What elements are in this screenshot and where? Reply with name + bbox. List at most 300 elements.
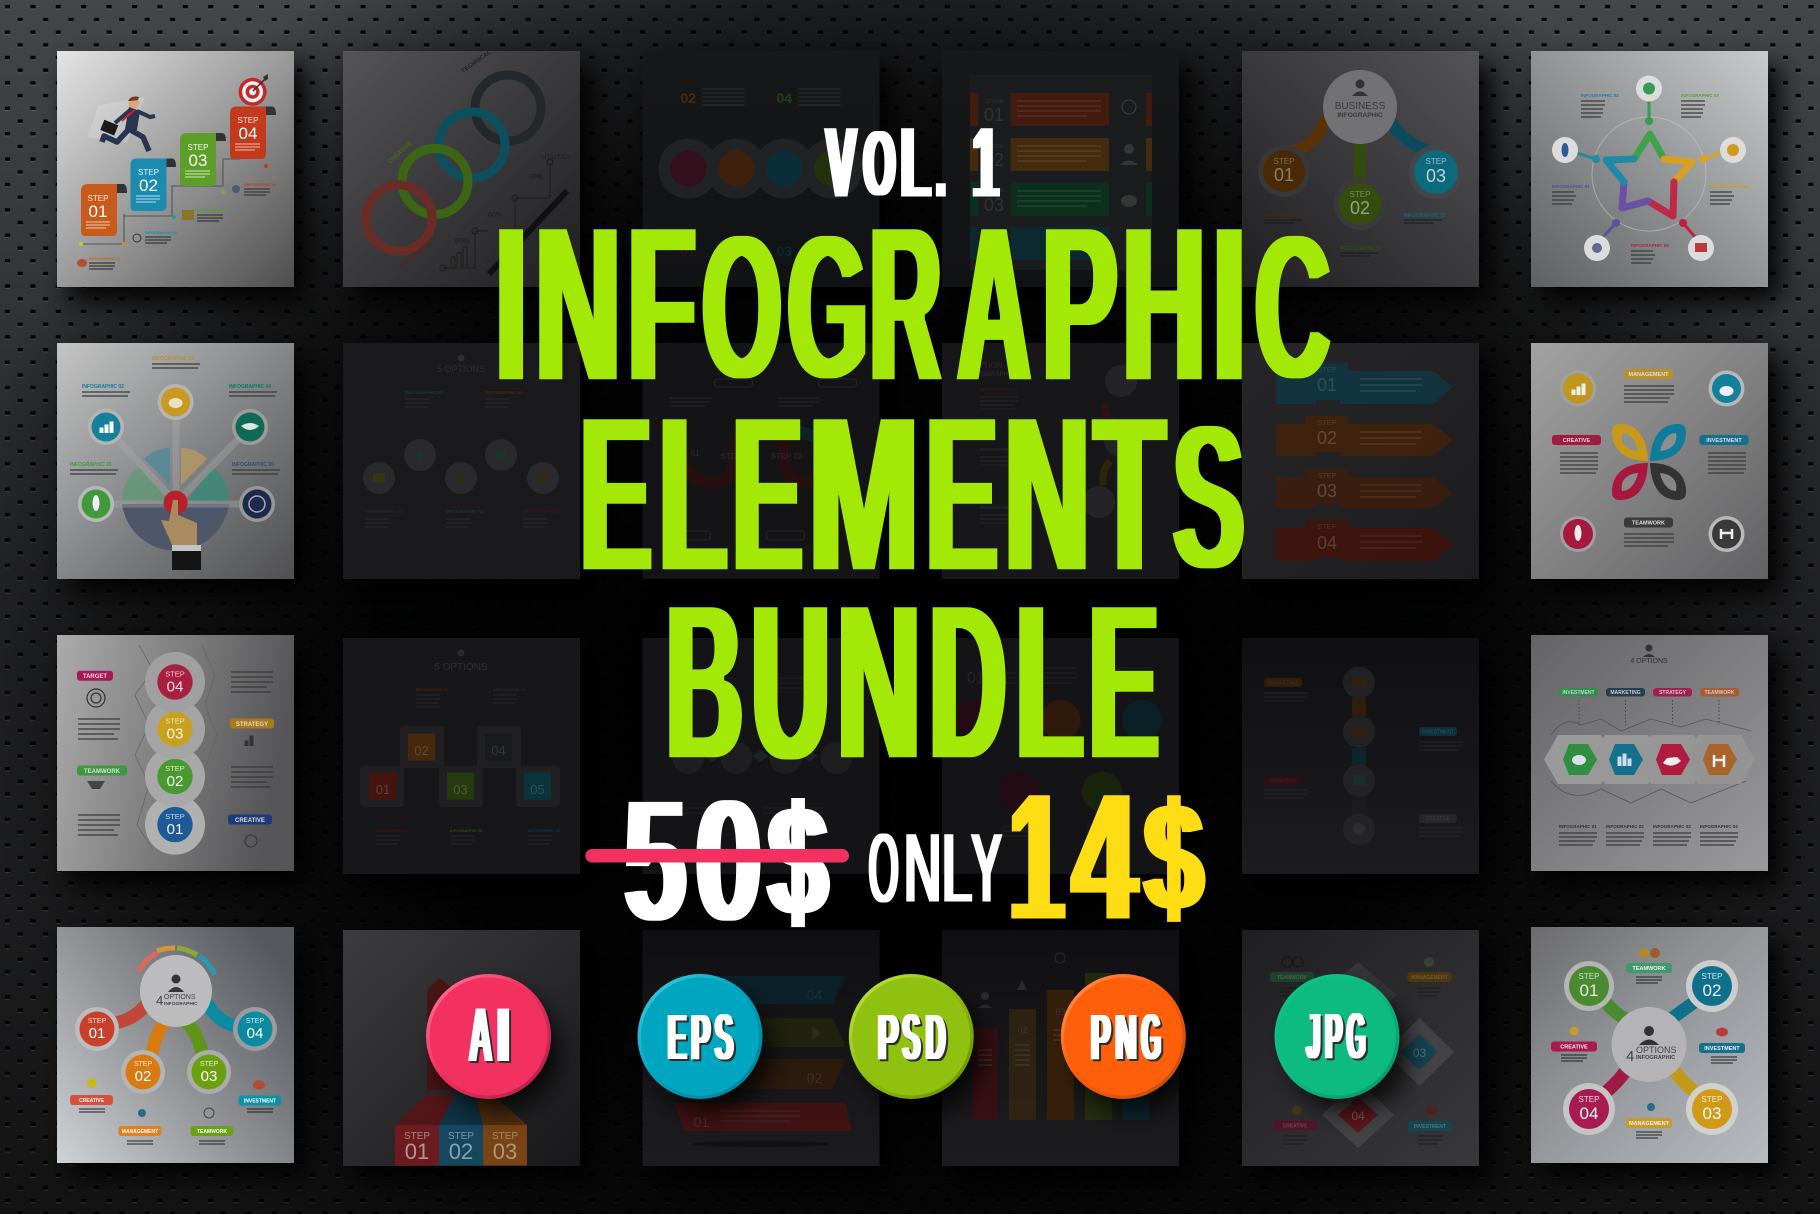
ring: green (402, 148, 468, 214)
step 03 (1686, 1083, 1738, 1135)
labels: INFOGRAPHIC 04 (229, 384, 271, 390)
panel: option connectors (dim) (942, 343, 1179, 579)
tags: TEAMWORK (1277, 975, 1307, 981)
option 03 bar: OPTION (984, 188, 1004, 194)
captions (365, 390, 561, 514)
step 01: STEP (165, 812, 185, 821)
banner step 04: 04 (807, 987, 822, 1003)
button and hand (161, 491, 201, 570)
badge: EPS: P (691, 1000, 710, 1075)
sketch: rising bars and pen (440, 155, 570, 274)
tags: INVESTMENT (1414, 1124, 1446, 1130)
step 03: STEP (200, 1061, 218, 1068)
step labels: 03 (776, 243, 792, 259)
title: infographic: P (1042, 179, 1117, 429)
petals (1612, 424, 1686, 500)
step 01 ribbon: 01 (89, 202, 107, 221)
header (1630, 644, 1668, 665)
ring captions: TECHNICAL (461, 50, 493, 75)
step 02 circle: 02 (1350, 198, 1370, 218)
badge: AI: I (496, 991, 511, 1079)
infographic notes: INFOGRAPHIC 02 (145, 231, 177, 235)
captions: INFOGRAPHIC 04 (485, 390, 523, 395)
step 04 ribbon: STEP (238, 116, 258, 125)
step 01: STEP (404, 1131, 430, 1142)
badge: JPG: G (1347, 999, 1365, 1074)
star ribbon (1606, 134, 1692, 216)
tags: MANAGEMENT (1629, 1121, 1670, 1127)
infographic notes (77, 164, 277, 269)
step 04 (145, 652, 205, 712)
title: infographic: I (1213, 179, 1246, 429)
banner step 04 (674, 976, 846, 1004)
step 02 (121, 1050, 165, 1094)
step 04 ribbon: 04 (239, 124, 257, 143)
hub: 4 (156, 993, 163, 1008)
price: new price 14$: $ (1144, 767, 1203, 946)
step captions: 01 (690, 449, 700, 458)
step captions: STEP 03 (770, 452, 803, 461)
tags: MANAGEMENT (1411, 975, 1448, 981)
option 02 bar: OPTION (984, 144, 1004, 150)
pills (77, 671, 274, 824)
panel: fan wheel with pointing hand (57, 343, 294, 579)
banner step 01: 01 (694, 1114, 709, 1130)
tags: MANAGEMENT (122, 1129, 158, 1135)
tags (1551, 963, 1745, 1128)
step 02: 02 (135, 1068, 151, 1085)
header: 5 OPTIONS (434, 662, 488, 673)
tags: TEAMWORK (1704, 690, 1735, 696)
pills: INVESTMENT (1706, 438, 1742, 444)
tags: MARKETING (1268, 680, 1298, 686)
captions: INFOGRAPHIC 04 (493, 688, 526, 692)
step 02: STEP (1702, 972, 1722, 981)
bar labels: 02 (1017, 1025, 1028, 1035)
captions: INFOGRAPHIC 01 (980, 387, 1018, 392)
step captions: STEP (720, 452, 742, 461)
arrow step 01: STEP (1318, 367, 1336, 374)
hub: INFOGRAPHIC (1636, 1055, 1675, 1061)
step 03: STEP (165, 716, 185, 726)
step 03 ribbon: 03 (189, 151, 207, 170)
title: elements: S (1173, 381, 1244, 612)
arrow step 04: 04 (1317, 533, 1337, 553)
ring: black (475, 75, 541, 141)
step 03: 03 (493, 1139, 517, 1164)
doodles (135, 645, 217, 850)
step 01: 01 (167, 821, 183, 838)
step label: 01 (967, 670, 985, 687)
step 03: 03 (201, 1068, 217, 1085)
panel: four option bars (942, 51, 1179, 287)
labels: INFOGRAPHIC 01 (70, 462, 112, 468)
badge: EPS: S (715, 1000, 733, 1075)
title: infographic: N (535, 179, 621, 429)
hub: OPTIONS (164, 994, 196, 1001)
header: 4 OPTIONS (1630, 658, 1668, 665)
satellite icons (78, 384, 275, 522)
title: infographic: F (628, 179, 696, 429)
connectors (1605, 1001, 1696, 1093)
step squares: 04 (491, 743, 506, 758)
panel: vertical timeline (dim) (1242, 638, 1479, 874)
bar labels (1017, 1007, 1066, 1035)
icons and notes (87, 689, 257, 847)
panel: four numbered circles row (642, 51, 880, 287)
diamonds: 04 (1351, 1109, 1365, 1123)
step 02 circle: STEP (1350, 190, 1370, 199)
step 02: 02 (449, 1139, 473, 1164)
column text: INFOGRAPHIC 02 (1606, 824, 1644, 829)
step 03: STEP (492, 1131, 518, 1142)
banner step 02 (674, 1059, 846, 1089)
captions: INFOGRAPHIC 02 (980, 447, 1018, 452)
header (434, 650, 488, 673)
step 03 (145, 699, 205, 759)
title: elements: T (1094, 369, 1165, 619)
bars (972, 973, 1149, 1120)
tags: INVESTMENT (244, 1098, 276, 1104)
step 03 circle (1409, 145, 1463, 199)
step 04: 04 (1580, 1104, 1598, 1123)
ring captions: INVESTMENT (398, 241, 432, 271)
title: elements: E (926, 369, 998, 619)
infographic notes: INFOGRAPHIC 01 (89, 257, 121, 261)
title: infographic: C (1255, 191, 1330, 422)
badge: PSD: D (926, 1000, 945, 1075)
captions: OPTION (972, 361, 1003, 370)
panel: step staircase with running businessman (57, 51, 294, 287)
ring captions (387, 50, 493, 271)
captions (972, 361, 1018, 510)
price: new price 14$: 1 (1009, 754, 1064, 960)
price: struck old price 50$: 5 (624, 763, 686, 959)
price: struck old price 50$: 0 (696, 763, 761, 959)
icon: running businessman (100, 96, 155, 151)
badge: JPG: J (1306, 999, 1320, 1074)
tags: TEAMWORK (197, 1129, 227, 1135)
tags: CREATIVE (79, 1098, 105, 1104)
text: 1 (973, 105, 998, 219)
column text: INFOGRAPHIC 01 (1559, 824, 1597, 829)
badge: PNG: N (1115, 1000, 1137, 1075)
icon: target (239, 74, 268, 106)
title: elements: L (659, 369, 727, 619)
step 03: 03 (167, 726, 183, 742)
title: infographic: H (1123, 179, 1205, 429)
captions: INFOGRAPHIC 03 (446, 509, 484, 514)
badge: PNG: P (1091, 1000, 1110, 1075)
title: vol. 1: V (826, 105, 856, 219)
hub: INFOGRAPHIC (164, 1001, 198, 1007)
arrow step 01: 01 (1317, 375, 1337, 395)
step 01 circle: STEP (1274, 157, 1294, 166)
step 03: 03 (1703, 1104, 1721, 1123)
step 04 ribbon (230, 106, 276, 159)
title: elements: E (733, 369, 802, 619)
tags (1559, 688, 1739, 696)
fan wedges (97, 403, 257, 551)
captions (376, 688, 560, 833)
panel: four options hub with corner steps (1531, 927, 1768, 1163)
panel: four arrow banners (dim) (1242, 343, 1479, 579)
panel: four petals (1531, 343, 1768, 579)
title: bundle: L (1016, 557, 1083, 807)
infographic notes: INFOGRAPHIC 03 (197, 209, 229, 213)
panel: four hexagons with doodles (1531, 635, 1768, 871)
banner step 01 (674, 1103, 852, 1131)
pills: MANAGEMENT (1628, 372, 1669, 378)
text: E (1089, 557, 1159, 807)
hexagons (1544, 735, 1755, 784)
step labels: 02 (680, 90, 696, 106)
tags: STRATEGY (1659, 690, 1687, 696)
ring: teal (439, 112, 505, 178)
panel: five stepped squares (dim) (343, 638, 580, 874)
step 03 circle: STEP (1426, 157, 1446, 166)
labels: INFOGRAPHIC 03 (152, 356, 194, 362)
title: vol. 1: L (901, 105, 930, 219)
panel: five circle wave (dim) (343, 343, 580, 579)
connectors (1292, 117, 1428, 179)
sketch: rising bars and pen: 90% (529, 174, 543, 181)
labels: INFOGRAPHIC 02 (1581, 93, 1619, 98)
step labels: 04 (776, 90, 792, 106)
step 01: STEP (88, 1018, 106, 1025)
labels: INFOGRAPHIC 03 (1681, 93, 1719, 98)
step 03: STEP (1702, 1095, 1722, 1104)
step 02 ribbon (130, 158, 176, 211)
price: only: N (904, 814, 941, 922)
captions: INFOGRAPHIC 01 (376, 829, 408, 833)
sketch: rising bars and pen: UTILITIES (542, 155, 570, 161)
icons (978, 953, 1065, 1008)
arc over hub (139, 953, 157, 971)
labels (70, 356, 274, 468)
price: struck old price 50$ (585, 763, 849, 959)
title: elements: M (809, 369, 919, 619)
badge: AI (426, 974, 560, 1112)
labels: INFOGRAPHIC 01 (1552, 184, 1590, 189)
column text (1559, 824, 1738, 829)
step 03 (483, 1125, 527, 1166)
title: infographic: O (702, 191, 781, 422)
option 04 bar (970, 227, 1152, 260)
labels: INFOGRAPHIC 02 (1340, 246, 1382, 252)
step 02 ribbon: 02 (139, 176, 158, 195)
title: bundle: U (751, 557, 830, 807)
hub circle (1323, 70, 1397, 144)
badge: PNG: G (1141, 1000, 1161, 1075)
tags: INVESTMENT (1562, 690, 1595, 696)
text: Y (972, 814, 1002, 922)
title: infographic: G (788, 191, 868, 422)
step 01: STEP (1579, 972, 1599, 981)
step 02 circle (1334, 178, 1386, 230)
diamonds (1319, 962, 1454, 1148)
option 01 bar (970, 93, 1152, 126)
step 03 circle: 03 (1426, 166, 1446, 186)
arrow step 03: STEP (1318, 473, 1336, 480)
step squares: 05 (530, 782, 545, 797)
tags: CREATIVE (1560, 1044, 1588, 1050)
step 01: 01 (89, 1025, 105, 1042)
tags: INVESTMENT (1422, 730, 1454, 736)
price: struck old price 50$: $ (768, 769, 828, 952)
labels: INFOGRAPHIC 05 (1631, 243, 1669, 248)
badge: PNG (1061, 974, 1195, 1112)
step 03 ribbon (180, 133, 226, 186)
badge: EPS: E (668, 1000, 686, 1075)
panel: interlocking rings (343, 50, 580, 287)
arrow step 04 (1276, 520, 1453, 561)
step squares (369, 734, 551, 800)
arrow step 02: STEP (1318, 420, 1336, 427)
panel: s-curve steps (dim) (642, 343, 880, 579)
labels (1264, 213, 1446, 252)
step 04: 04 (247, 1025, 263, 1042)
header (437, 354, 485, 374)
step squares: 02 (414, 743, 429, 758)
panel: diamonds (dim) (1242, 930, 1479, 1166)
column text: INFOGRAPHIC 03 (1653, 824, 1691, 829)
arrow step 03 (1276, 469, 1453, 508)
captions: INFOGRAPHIC 03 (450, 829, 482, 833)
step captions (690, 449, 803, 461)
pills: TEAMWORK (84, 769, 121, 775)
badge: JPG (1274, 974, 1409, 1112)
tags (1264, 678, 1457, 823)
ring: red (366, 185, 432, 251)
step 04: 04 (167, 678, 183, 696)
labels: INFOGRAPHIC 02 (82, 384, 124, 390)
tags: MARKETING (1610, 690, 1641, 696)
panel: three step perspective ribbons (343, 930, 580, 1166)
title: vol. 1: O (864, 110, 895, 216)
title: infographic: I (496, 179, 526, 429)
price: only: O (869, 814, 898, 922)
panel: star with five satellites (1531, 51, 1768, 287)
arrow step 04: STEP (1318, 524, 1336, 531)
badge: PSD: P (878, 1000, 898, 1075)
title: elements: E (580, 369, 652, 619)
step labels (680, 90, 792, 259)
pills (1552, 369, 1748, 528)
hub: 4 (1626, 1048, 1634, 1065)
tags (70, 1095, 282, 1136)
captions: INFOGRAPHIC 05 (528, 829, 560, 833)
step labels: 01 (680, 243, 696, 259)
tags (1270, 972, 1452, 1131)
captions: INFOGRAPHIC 02 (405, 390, 443, 395)
step 01: 01 (405, 1139, 429, 1164)
sketch: rising bars and pen: 80% (455, 238, 469, 245)
captions: INFOGRAPHIC (972, 372, 1015, 378)
title: vol. 1: . (937, 105, 945, 219)
price: new price 14$: 4 (1072, 754, 1137, 960)
arrow step 02 (1276, 416, 1453, 456)
step 02: STEP (448, 1131, 474, 1142)
title: elements: N (1005, 369, 1090, 619)
badge: JPG: P (1325, 999, 1342, 1074)
step 02 (1686, 960, 1738, 1012)
banner step 03 (688, 1018, 846, 1047)
panel: business infographic three steps (1242, 51, 1479, 287)
step 01 (75, 1007, 119, 1051)
step squares: 03 (453, 782, 468, 797)
step 02 (145, 746, 205, 806)
satellites (1552, 76, 1746, 261)
panel: four options hub with steps (57, 927, 294, 1163)
step 02: STEP (165, 764, 185, 773)
step 01 circle (1258, 145, 1310, 197)
captions: INFOGRAPHIC 05 (523, 509, 561, 514)
tags: CREATIVE (1283, 1124, 1308, 1130)
step 04: STEP (1579, 1095, 1599, 1104)
hub (1612, 1007, 1686, 1082)
option 03 bar (970, 182, 1152, 216)
captions: INFOGRAPHIC 03 (980, 505, 1018, 510)
header: 5 OPTIONS (437, 364, 485, 374)
column text: INFOGRAPHIC 04 (1700, 824, 1738, 829)
tags: INVESTMENT (1704, 1046, 1740, 1052)
step 04: STEP (165, 670, 185, 678)
step 02: 02 (1703, 981, 1721, 1000)
icons: bulb, person, piggy (1120, 100, 1138, 207)
step 03 (187, 1050, 231, 1094)
option 03 bar: 03 (984, 195, 1004, 215)
bar labels: 03 (1055, 1007, 1066, 1017)
captions: INFOGRAPHIC 01 (365, 509, 403, 514)
captions: INFOGRAPHIC 02 (416, 688, 448, 692)
option 01 bar: OPTION (984, 99, 1004, 105)
panel: star connectors (dim) (642, 638, 880, 874)
panel: three columns of circles (dim) (942, 638, 1179, 874)
step 02: 02 (167, 773, 183, 790)
step 01 ribbon: STEP (88, 194, 108, 203)
pills: STRATEGY (236, 722, 268, 728)
tags: STRATEGY (1270, 778, 1297, 784)
tags (672, 379, 856, 540)
step 04 (233, 1007, 277, 1051)
step 01: 01 (1580, 981, 1598, 1000)
step 02 (439, 1125, 483, 1166)
ribbons (395, 1095, 527, 1125)
step 01 (1564, 961, 1614, 1011)
labels: INFOGRAPHIC 01 (1264, 213, 1306, 219)
badge: AI: A (469, 991, 492, 1079)
pills: TEAMWORK (1632, 520, 1665, 526)
arrow step 03: 03 (1317, 481, 1337, 501)
labels: INFOGRAPHIC 05 (232, 462, 274, 468)
banner step 02: 02 (807, 1070, 822, 1086)
sketch: rising bars and pen: 60% (488, 212, 502, 219)
hub (140, 955, 212, 1027)
arrow step 02: 02 (1317, 428, 1337, 448)
price: only: L (942, 814, 972, 922)
ring captions: CREATIVE (387, 141, 414, 165)
step 03 ribbon: STEP (188, 143, 208, 152)
option 02 bar (970, 138, 1152, 171)
panel: bar chart columns (dim) (942, 930, 1179, 1166)
step 01 (145, 795, 205, 855)
option 01 bar: 01 (984, 105, 1004, 125)
labels (1552, 93, 1748, 248)
pills: CREATIVE (1563, 438, 1591, 444)
corner icons (1560, 370, 1744, 552)
timeline nodes (1343, 667, 1375, 846)
